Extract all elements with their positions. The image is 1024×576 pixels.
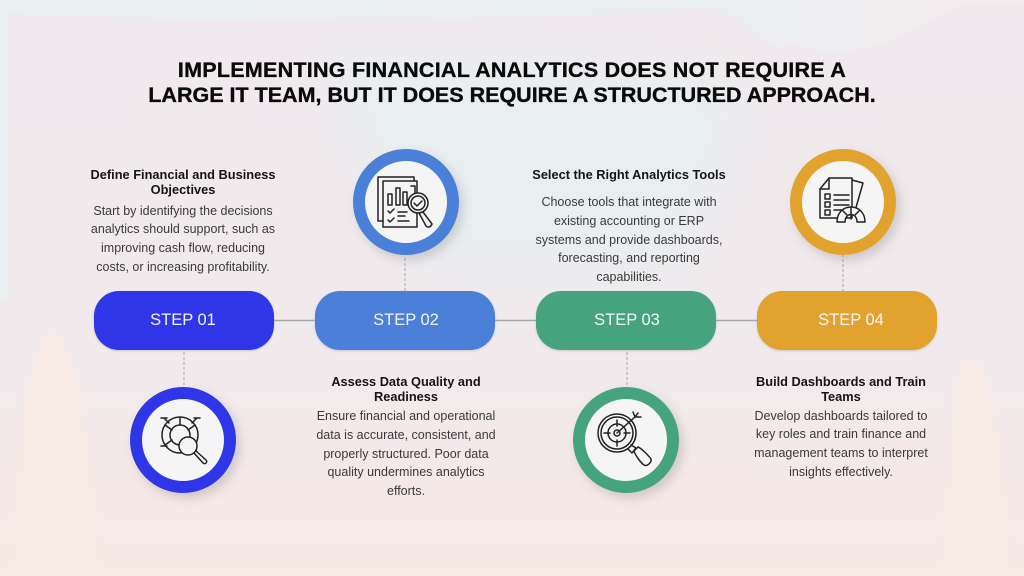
- step 02 pill: STEP 02: [373, 311, 439, 329]
- text block: step 02: Assess Data Quality and: [331, 374, 481, 389]
- step 04 pill: STEP 04: [818, 311, 884, 329]
- text block: step 02: efforts.: [387, 484, 425, 498]
- text block: step 02: [316, 374, 496, 498]
- text block: step 02: Readiness: [374, 389, 438, 404]
- text block: step 02: Ensure financial and operational: [317, 409, 495, 423]
- title: IMPLEMENTING FINANCIAL ANALYTICS DOES NOT REQUIRE A: [178, 58, 846, 82]
- text block: step 04: [754, 374, 928, 479]
- text block: step 03: forecasting, and reporting: [558, 251, 700, 265]
- step 01 pill: STEP 01: [150, 311, 216, 329]
- text block: step 04: Teams: [821, 389, 861, 404]
- step 03 pill: [536, 291, 716, 350]
- text block: step 03: Select the Right Analytics Tools: [532, 167, 726, 182]
- icon: target magnifier, step 03: [573, 387, 679, 493]
- text block: step 02: properly structured. Poor data: [323, 446, 489, 460]
- text block: step 03: capabilities.: [596, 270, 662, 284]
- text block: step 04: Develop dashboards tailored to: [754, 409, 928, 423]
- text block: step 03: existing accounting or ERP: [554, 214, 704, 228]
- text block: step 01: improving cash flow, reducing: [101, 241, 265, 255]
- text block: step 03: systems and provide dashboards,: [536, 233, 722, 247]
- pale grey wedge behind the title: [330, 40, 750, 270]
- text block: step 01: analytics should support, such as: [91, 222, 275, 236]
- text block: step 01: [91, 167, 275, 274]
- text block: step 03: [532, 167, 726, 284]
- text block: step 01: Define Financial and Business: [91, 167, 275, 182]
- text block: step 01: costs, or increasing profitability.: [96, 260, 270, 274]
- text block: step 01: Objectives: [151, 182, 215, 197]
- text block: step 04: insights effectively.: [789, 465, 893, 479]
- text block: step 04: key roles and train finance and: [756, 427, 926, 441]
- step 03 pill: STEP 03: [594, 311, 660, 329]
- icon: analytics magnifier, step 01: [130, 387, 236, 493]
- text block: step 02: quality undermines analytics: [327, 465, 485, 479]
- title: LARGE IT TEAM, BUT IT DOES REQUIRE A STRUCTURED APPROACH.: [148, 83, 876, 107]
- text block: step 04: Build Dashboards and Train: [756, 374, 926, 389]
- icon: report with magnifier, step 02: [353, 149, 459, 255]
- step 04 pill: [757, 291, 937, 350]
- text block: step 04: management teams to interpret: [754, 446, 928, 460]
- step 02 pill: [315, 291, 495, 350]
- text block: step 01: Start by identifying the decisions: [93, 204, 273, 218]
- title: [148, 58, 876, 107]
- text block: step 03: Choose tools that integrate with: [541, 195, 717, 209]
- icon: documents with gauge, step 04: [790, 149, 896, 255]
- step 01 pill: [94, 291, 274, 350]
- text block: step 02: data is accurate, consistent, and: [316, 428, 496, 442]
